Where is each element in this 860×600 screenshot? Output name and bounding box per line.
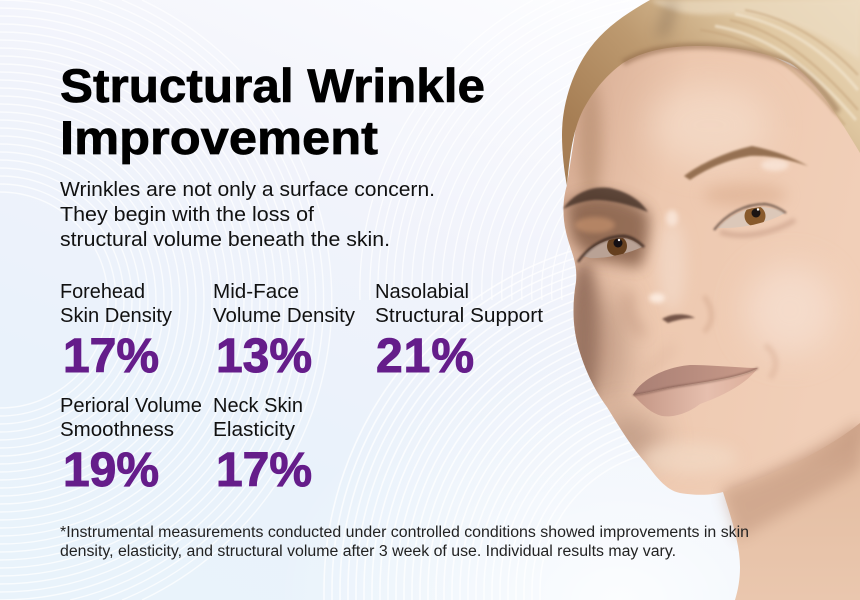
- stat: forehead skin density: 17%: [63, 330, 159, 383]
- stat: mid-face volume density: Volume Density: [213, 305, 355, 327]
- intro text: Wrinkles are not only a surface concern.: [60, 178, 435, 201]
- stat: forehead skin density: Skin Density: [60, 305, 172, 327]
- stat: nasolabial structural support: Structural Support: [375, 305, 543, 327]
- footnote: density, elasticity, and structural volume after 3 week of use. Individual results may vary.: [60, 543, 676, 560]
- stat: mid-face volume density: Mid-Face: [213, 281, 299, 303]
- neck: [700, 400, 860, 600]
- stat: mid-face volume density: 13%: [216, 330, 312, 383]
- intro text: [60, 178, 435, 251]
- title: [60, 59, 485, 164]
- left eye: [578, 236, 644, 262]
- stat: nasolabial structural support: 21%: [376, 330, 474, 383]
- stat: forehead skin density: [60, 281, 172, 383]
- stat: nasolabial structural support: [375, 281, 543, 383]
- stat: neck skin elasticity: Neck Skin: [213, 395, 303, 417]
- stat: neck skin elasticity: Elasticity: [213, 419, 295, 441]
- footnote: *Instrumental measurements conducted under controlled conditions showed improvements in skin: [60, 524, 749, 541]
- face shading: [566, 80, 860, 510]
- stat: perioral volume smoothness: 19%: [63, 444, 159, 497]
- neck shadow: [723, 423, 860, 540]
- background line pattern: upper right arcs: [360, 0, 690, 300]
- background line pattern: left arcs: [0, 0, 332, 600]
- nose: [629, 292, 712, 334]
- stat: perioral volume smoothness: Perioral Volume: [60, 395, 202, 417]
- intro text: They begin with the loss of: [60, 203, 314, 226]
- right eye: [714, 204, 786, 230]
- intro text: structural volume beneath the skin.: [60, 228, 390, 251]
- footnote: [60, 524, 749, 560]
- left brow: [563, 187, 648, 212]
- title: Structural Wrinkle: [60, 59, 485, 112]
- stat: forehead skin density: Forehead: [60, 281, 145, 303]
- right brow: [684, 146, 808, 180]
- stat: mid-face volume density: [213, 281, 355, 383]
- stat: neck skin elasticity: [213, 395, 312, 497]
- face: [563, 40, 860, 495]
- stat: perioral volume smoothness: [60, 395, 202, 497]
- lips: [633, 365, 758, 416]
- stat: neck skin elasticity: 17%: [216, 444, 312, 497]
- title: Improvement: [60, 111, 378, 164]
- stat: nasolabial structural support: Nasolabial: [375, 281, 469, 303]
- stat: perioral volume smoothness: Smoothness: [60, 419, 174, 441]
- hair: [562, 0, 860, 186]
- portrait photo of woman: [562, 0, 860, 600]
- background line pattern: lower right arcs: [324, 234, 680, 600]
